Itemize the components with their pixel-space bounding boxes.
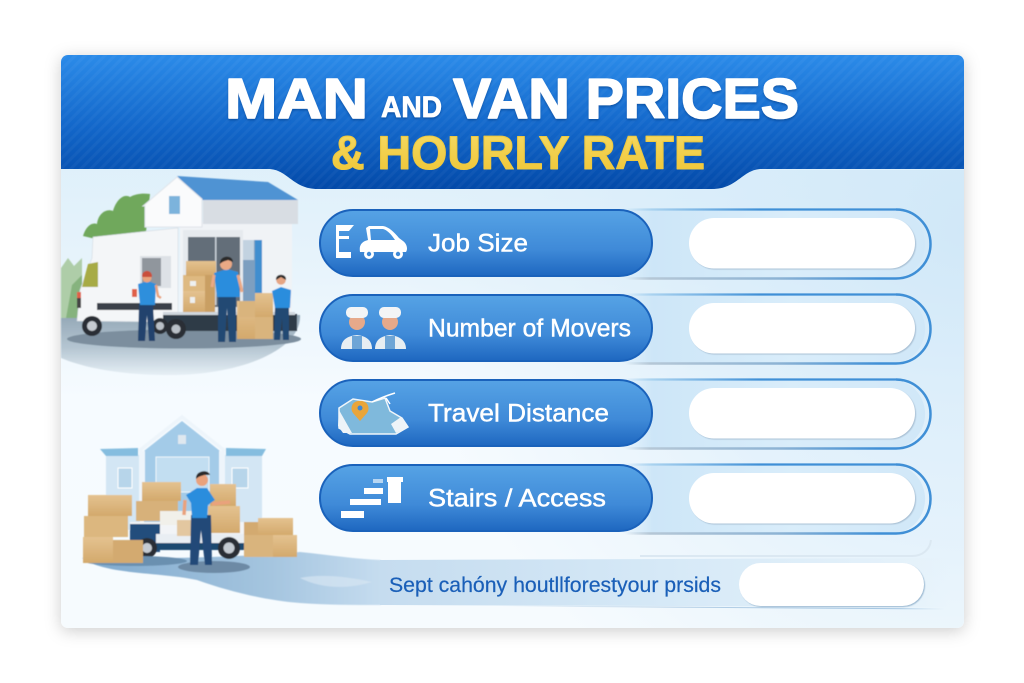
- row: number of movers: [320, 294, 931, 364]
- mover right: [272, 275, 291, 340]
- header banner: [61, 55, 964, 189]
- label pill: [320, 380, 652, 446]
- label text: Stairs / Access: [428, 484, 606, 512]
- light ground: [61, 315, 300, 375]
- house body: [180, 222, 292, 314]
- trees: [61, 258, 82, 318]
- central house: [144, 421, 220, 530]
- van body: [77, 228, 178, 322]
- title: [225, 67, 799, 179]
- shadow under figure: [178, 561, 250, 573]
- truck: [130, 522, 244, 534]
- row: travel distance: [320, 380, 931, 448]
- illustration: house, boxes and mover: [82, 417, 381, 605]
- title: MAN: [225, 67, 368, 131]
- illustration: moving van and house: [61, 176, 301, 375]
- icon: stairs: [341, 477, 403, 518]
- icon: car and shelf: [336, 225, 407, 259]
- value track: [622, 210, 931, 278]
- icon: map with pin: [338, 393, 408, 434]
- value field: [689, 388, 915, 438]
- infographic canvas: [54, 50, 972, 638]
- icon: two movers: [341, 307, 406, 349]
- label pill: [320, 210, 652, 276]
- boxes left stack: [183, 291, 205, 312]
- label text: Number of Movers: [428, 314, 631, 342]
- value field: [689, 303, 915, 354]
- house roof: [177, 176, 298, 200]
- footer text: Sept cahóny houtllforestyour prsids: [389, 574, 721, 597]
- mover left: [138, 271, 161, 341]
- side wings: [106, 455, 140, 530]
- title: AND: [381, 91, 442, 124]
- decorative outline above footer: [640, 540, 931, 556]
- label text: Job Size: [428, 230, 528, 258]
- value track: [622, 380, 931, 448]
- footer value field: [739, 563, 924, 606]
- mover centre: [212, 257, 242, 342]
- blue puddle: [82, 552, 381, 605]
- panel: card background: [61, 55, 964, 628]
- label text: Travel Distance: [428, 400, 609, 428]
- value field: [689, 473, 915, 524]
- right box stacks: [210, 484, 236, 506]
- value track: [622, 464, 931, 534]
- title: VAN PRICES: [453, 67, 799, 131]
- value track: [622, 294, 931, 364]
- mover: [184, 471, 230, 565]
- door opening: [183, 230, 243, 314]
- label pill: [320, 465, 652, 531]
- wheels: [82, 316, 102, 336]
- ground shadow: [67, 330, 301, 348]
- label pill: [320, 295, 652, 361]
- house gable: [143, 177, 202, 227]
- row: job size: [320, 210, 931, 278]
- value field: [689, 218, 915, 268]
- footer bar: [380, 558, 950, 609]
- row: stairs / access: [320, 464, 931, 534]
- side window: [243, 240, 262, 302]
- boxes right stack: [237, 301, 255, 339]
- left box stacks: [88, 495, 132, 516]
- title: & HOURLY RATE: [331, 126, 705, 179]
- truck bed: [163, 314, 297, 331]
